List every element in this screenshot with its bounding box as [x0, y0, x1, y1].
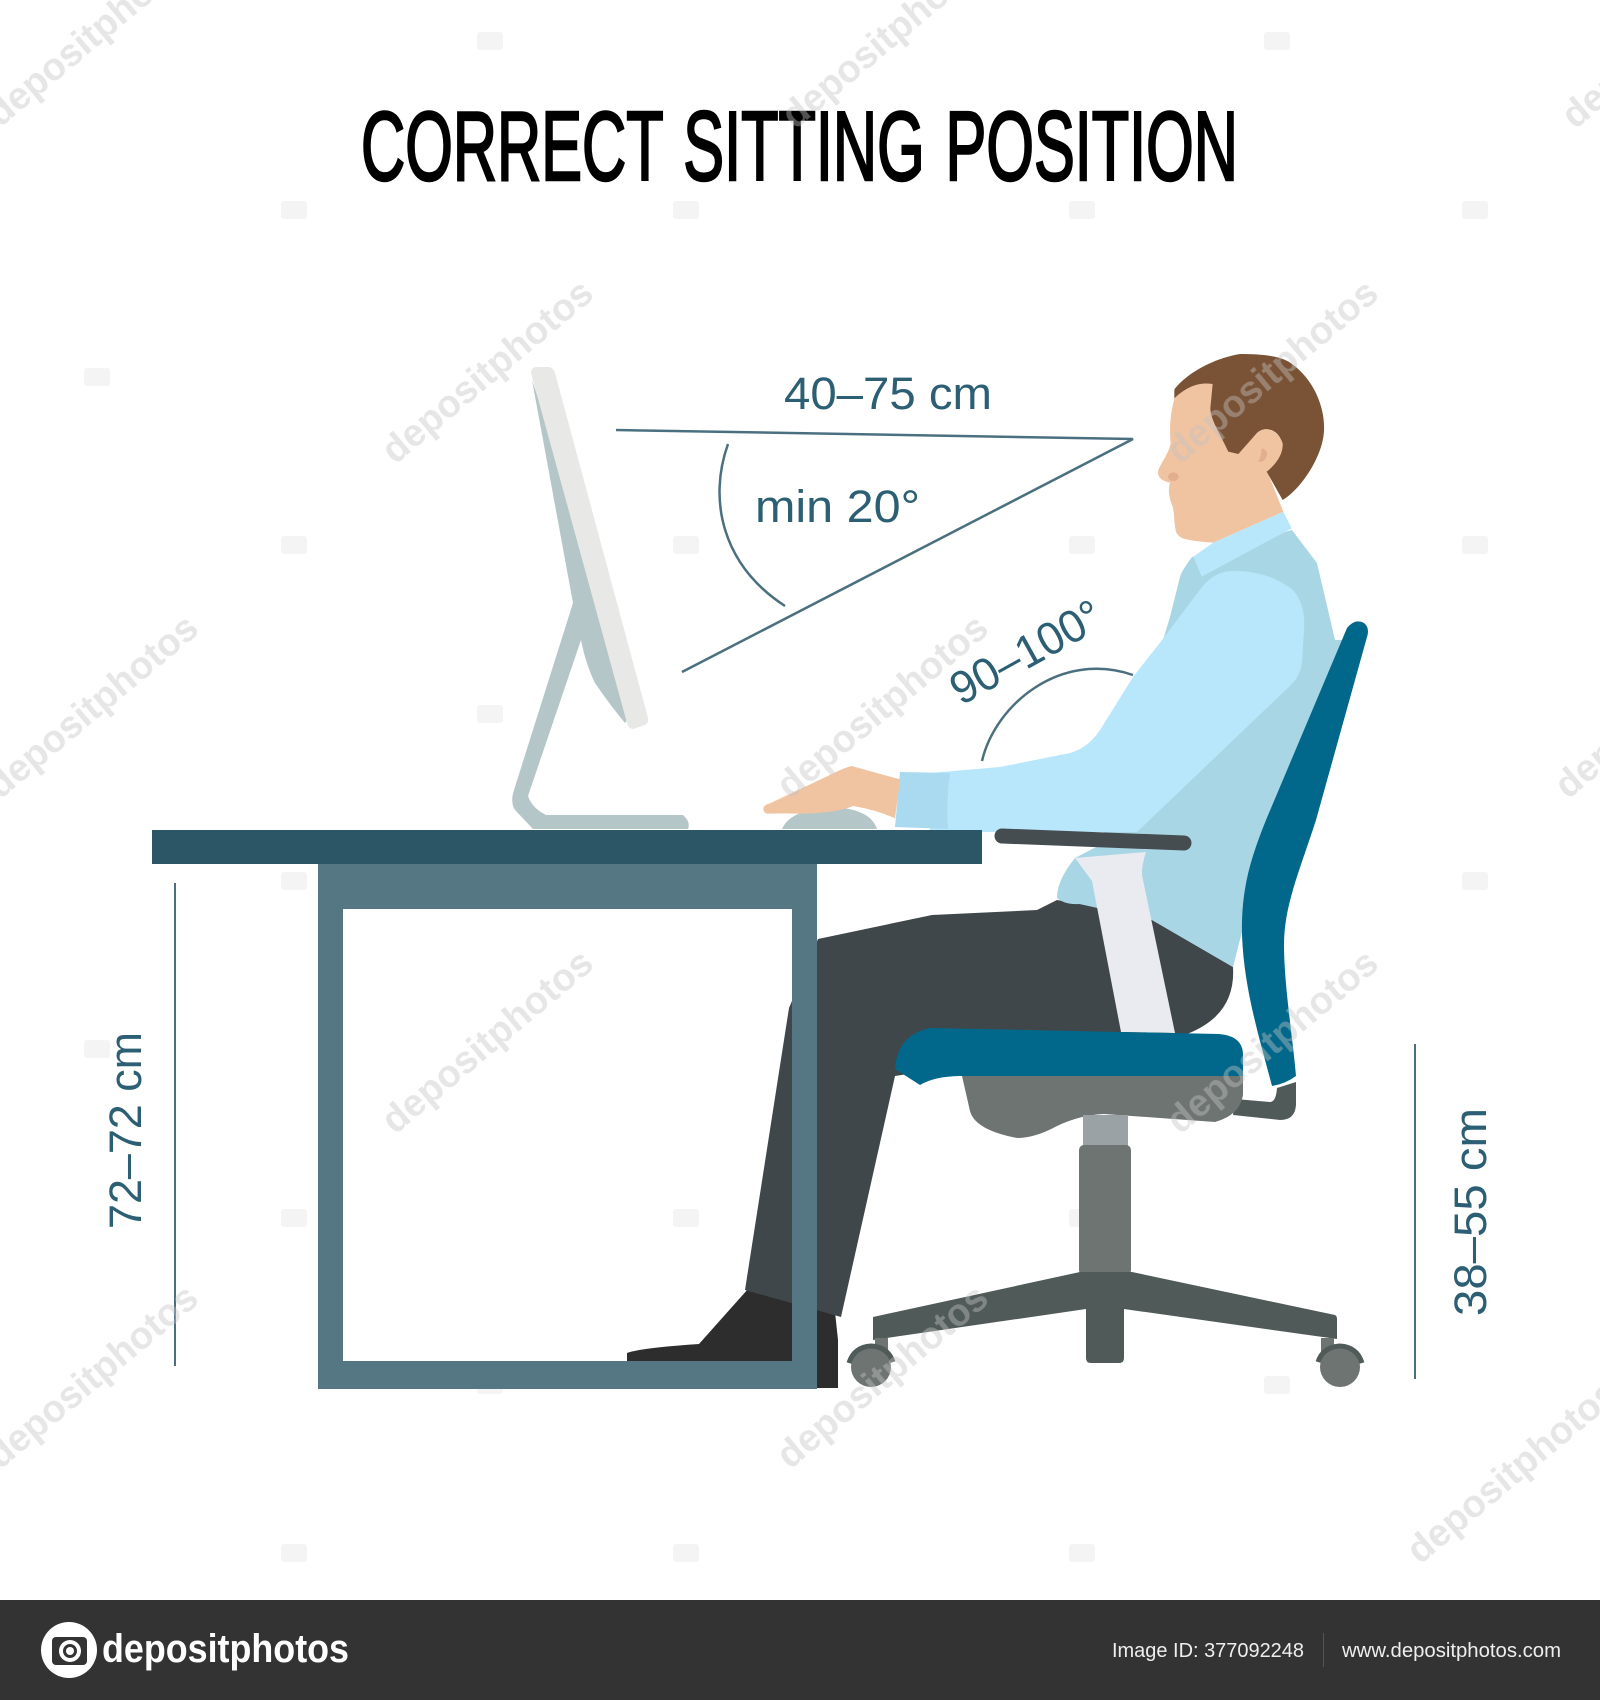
- sight lines: [616, 430, 1133, 672]
- elbow angle arc: [982, 669, 1133, 761]
- image id: Image ID: 377092248: [1112, 1640, 1304, 1662]
- infographic: depositphotos: [769, 1276, 996, 1477]
- chair: [849, 621, 1368, 1387]
- gas lift lower: [1079, 1145, 1131, 1275]
- ear shade: [1258, 448, 1267, 462]
- person: [627, 354, 1348, 1388]
- infographic: depositphotos: [1159, 271, 1386, 472]
- infographic: depositphotos: [374, 271, 601, 472]
- monitor stand and back: [512, 380, 689, 829]
- footer bar: [0, 1600, 1600, 1700]
- shoe: [627, 1289, 838, 1388]
- desk frame: [318, 864, 817, 1389]
- shirt collar: [1193, 512, 1292, 577]
- monitor screen: [531, 367, 648, 729]
- chair back bracket: [1233, 1082, 1296, 1120]
- gas lift upper: [1083, 1115, 1128, 1147]
- trousers: [745, 900, 1233, 1317]
- shirt cuff: [895, 772, 950, 829]
- neck and face: [1158, 383, 1283, 543]
- seat cushion: [895, 1028, 1243, 1085]
- label: elbow angle: 90–100°: [941, 589, 1111, 715]
- seat height line: [1414, 1044, 1416, 1379]
- desk: [318, 864, 817, 1389]
- armrest: [1002, 836, 1184, 843]
- viewing angle arc: [720, 444, 785, 606]
- desk right leg overlay: [792, 864, 817, 1389]
- desk top: [152, 830, 982, 864]
- chair base: [873, 1272, 1337, 1363]
- mouse: [782, 807, 877, 829]
- label: distance: 40–75 cm: [784, 368, 992, 419]
- infographic: depositphotos: [374, 941, 601, 1142]
- infographic: depositphotos: [769, 606, 996, 807]
- label: desk height: 72–72 cm: [100, 1032, 151, 1229]
- armrest support: [1075, 852, 1175, 1033]
- left caster: [849, 1338, 893, 1387]
- ear: [1247, 429, 1283, 472]
- desk height line: [174, 883, 176, 1366]
- hand: [763, 766, 900, 818]
- head: [1158, 354, 1324, 577]
- right caster: [1318, 1338, 1362, 1387]
- website: www.depositphotos.com: [1341, 1640, 1561, 1662]
- label: seat height: 38–55 cm: [1445, 1108, 1496, 1316]
- nose shade: [1168, 472, 1179, 481]
- label: viewing angle: min 20°: [755, 481, 920, 532]
- hair: [1174, 354, 1324, 500]
- monitor: [512, 367, 689, 829]
- shirt body: [1057, 530, 1348, 967]
- infographic: depositphotos: [1159, 941, 1386, 1142]
- shirt sleeve: [930, 571, 1304, 832]
- footer logo text: depositphotos: [102, 1627, 349, 1671]
- chair back: [1242, 621, 1368, 1086]
- footer logo icon: [41, 1622, 97, 1678]
- seat underside: [962, 1076, 1243, 1138]
